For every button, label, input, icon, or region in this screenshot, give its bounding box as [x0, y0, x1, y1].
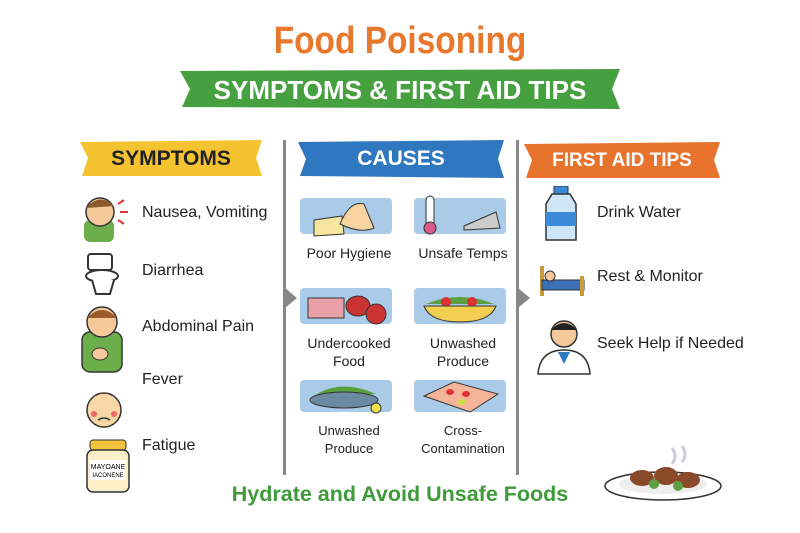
- cause: unwashed produce 2: Produce: [325, 441, 373, 456]
- text: seek help: Seek Help if Needed: [597, 335, 744, 352]
- arrow: causes to first aid: [519, 289, 530, 307]
- icon: bed: [540, 266, 584, 296]
- heading: causes: [298, 140, 504, 178]
- icon: mayonnaise jar: IACONENE: [92, 473, 124, 479]
- cause: cross-contamination: Contamination: [421, 441, 505, 456]
- panel: causes: [298, 140, 508, 456]
- icon: mayonnaise jar: MAYOANE: [91, 464, 126, 471]
- cause: unwashed produce 2: Unwashed: [318, 423, 380, 438]
- cause: undercooked food: Food: [333, 353, 365, 369]
- arrow: symptoms to causes: [286, 289, 297, 307]
- text: fatigue: Fatigue: [142, 437, 195, 454]
- cause: unwashed produce: Unwashed: [430, 335, 496, 351]
- cause: cross-contamination: [414, 380, 506, 456]
- subtitle banner: [180, 69, 620, 109]
- title: Food Poisoning: [274, 20, 526, 62]
- icon: water bottle: [545, 186, 577, 241]
- cause: undercooked food: [300, 288, 392, 369]
- heading: symptoms: SYMPTOMS: [111, 147, 231, 170]
- cause: undercooked food: Undercooked: [307, 335, 391, 351]
- panel: symptoms: [80, 140, 267, 493]
- cause: unwashed produce: Produce: [437, 353, 489, 369]
- heading: first aid tips: [524, 142, 720, 178]
- icon: abdominal pain: [81, 306, 123, 373]
- cause: cross-contamination: Cross-: [444, 423, 482, 438]
- text: rest & monitor: Rest & Monitor: [597, 268, 703, 285]
- text: abdominal pain: Abdominal Pain: [142, 318, 254, 335]
- icon: fever face: [86, 392, 122, 428]
- subtitle banner: SYMPTOMS & FIRST AID TIPS: [214, 75, 586, 105]
- icon: nausea face: [84, 197, 128, 242]
- cause: unsafe temps: Unsafe Temps: [418, 245, 508, 261]
- text: fever: Fever: [142, 371, 183, 388]
- footer tagline: Hydrate and Avoid Unsafe Foods: [232, 482, 568, 506]
- dividers: [283, 140, 286, 475]
- icon: doctor: [537, 320, 591, 375]
- heading: first aid tips: FIRST AID TIPS: [552, 150, 692, 171]
- cause: unwashed produce 2: [300, 380, 392, 456]
- icon: toilet: [85, 253, 119, 295]
- text: drink water: Drink Water: [597, 204, 681, 221]
- cause: poor hygiene: Poor Hygiene: [307, 245, 391, 261]
- cause: poor hygiene: [300, 198, 392, 261]
- cause: unsafe temps: [414, 196, 508, 261]
- cause: unwashed produce: [414, 288, 506, 369]
- text: nausea: Nausea, Vomiting: [142, 204, 267, 221]
- text: diarrhea: Diarrhea: [142, 262, 203, 279]
- icon: plate of food: [604, 445, 722, 501]
- icon: mayonnaise jar: [86, 440, 130, 493]
- heading: causes: CAUSES: [357, 147, 445, 170]
- heading: symptoms: [80, 140, 262, 176]
- panel: first aid: [524, 142, 744, 375]
